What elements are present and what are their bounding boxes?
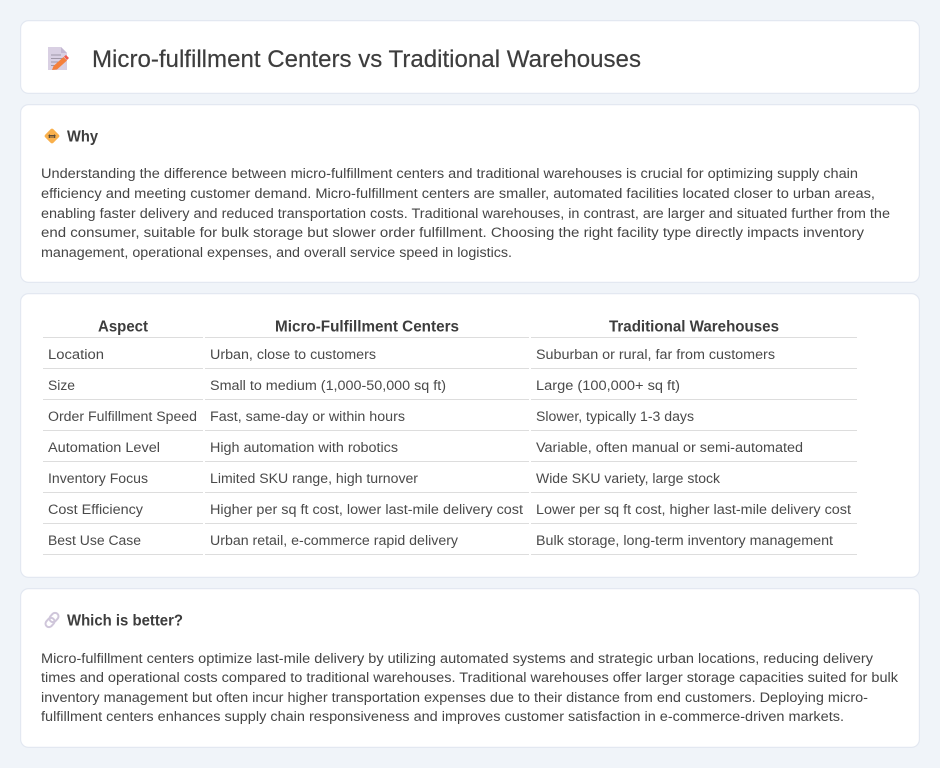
panel: header (21, 21, 919, 93)
row: automation level (48, 440, 803, 456)
row: cost efficiency (48, 502, 851, 518)
text block: why explanation: Understanding the difference between micro-fulfillment centers and traditional warehouses is crucial for optimizing supply chain (41, 166, 858, 182)
row: automation level: Variable, often manual or semi-automated (536, 440, 803, 456)
row: cost efficiency: Cost Efficiency (48, 502, 144, 518)
row: automation level: High automation with robotics (210, 440, 398, 456)
row: size (48, 378, 680, 394)
icon: document with pencil (48, 47, 69, 70)
row: order fulfillment speed: Fast, same-day or within hours (210, 409, 405, 425)
row: location: Urban, close to customers (210, 347, 376, 363)
row: size: Large (100,000+ sq ft) (536, 378, 680, 394)
row: inventory focus: Wide SKU variety, large stock (536, 471, 721, 487)
row: size: Size (48, 378, 75, 394)
table header row (98, 318, 779, 336)
row: cost efficiency: Higher per sq ft cost, lower last-mile delivery cost (210, 502, 523, 518)
text block: which is better explanation: times and operational costs compared to traditional warehouses. Traditional warehouses offer larger storage capacities suited for bulk (41, 670, 899, 686)
text block: which is better explanation: Micro-fulfillment centers optimize last-mile delivery by utilizing automated systems and strategic urban locations, reducing delivery (41, 651, 874, 667)
icon: warning diamond (44, 128, 60, 144)
row: best use case: Best Use Case (48, 533, 141, 549)
row: best use case (48, 533, 833, 549)
row: cost efficiency: Lower per sq ft cost, higher last-mile delivery cost (536, 502, 851, 518)
text block: why explanation (41, 166, 890, 261)
title: Micro-fulfillment Centers vs Traditional Warehouses (92, 46, 641, 73)
heading: which is better: Which is better? (67, 612, 183, 630)
row: size: Small to medium (1,000-50,000 sq ft) (210, 378, 446, 394)
panel: why (21, 105, 919, 282)
table header row: Micro-Fulfillment Centers (275, 318, 459, 336)
row: inventory focus: Limited SKU range, high turnover (210, 471, 418, 487)
text block: why explanation: end consumer, suitable for bulk storage but slower order fulfillment. Choosing the right facility type directly impacts inventory (41, 225, 865, 241)
row: location (48, 347, 775, 363)
row: inventory focus (48, 471, 721, 487)
text block: why explanation: management, operational expenses, and overall service speed in logistics. (41, 245, 512, 261)
text block: which is better explanation (41, 651, 899, 725)
row: order fulfillment speed: Order Fulfillment Speed (48, 409, 197, 425)
panel: which is better (21, 589, 919, 747)
row: best use case: Bulk storage, long-term inventory management (536, 533, 833, 549)
text block: which is better explanation: inventory management but often incur higher transportation expenses due to their distance from end customers. Deploying micro- (41, 690, 868, 706)
row: location: Suburban or rural, far from customers (536, 347, 775, 363)
panel: comparison table (21, 294, 919, 577)
row: automation level: Automation Level (48, 440, 160, 456)
text block: why explanation: enabling faster delivery and reduced transportation costs. Traditional warehouses, in contrast, are larger and situated further from the (41, 206, 890, 222)
row: best use case: Urban retail, e-commerce rapid delivery (210, 533, 459, 549)
row: inventory focus: Inventory Focus (48, 471, 148, 487)
text block: which is better explanation: fulfillment centers enhances supply chain responsiveness and improves customer satisfaction in e-commerce-driven markets. (41, 709, 844, 725)
row: order fulfillment speed (48, 409, 694, 425)
row: order fulfillment speed: Slower, typically 1-3 days (536, 409, 694, 425)
heading: why: Why (67, 128, 98, 146)
text block: why explanation: efficiency and meeting customer demand. Micro-fulfillment centers are smaller, automated facilities located closer to urban areas, (41, 186, 875, 202)
table header row: Traditional Warehouses (609, 318, 779, 336)
table header row: Aspect (98, 318, 149, 336)
row: location: Location (48, 347, 104, 363)
icon: link (44, 611, 60, 629)
